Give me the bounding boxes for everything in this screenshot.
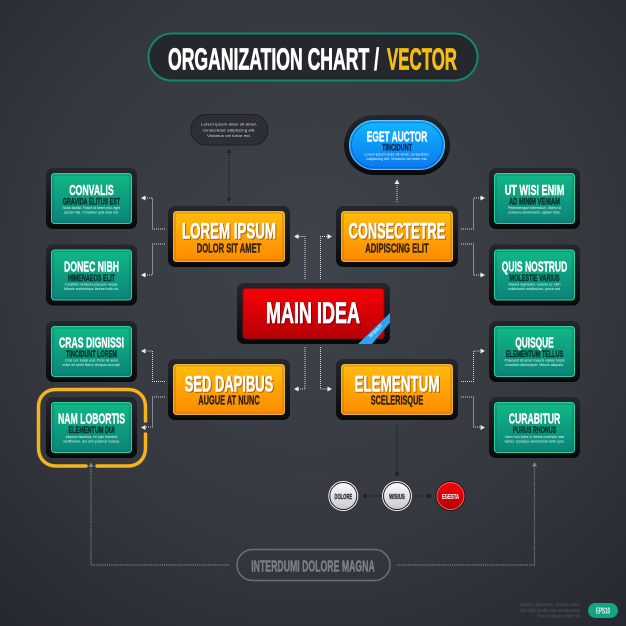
- connectors: left orange boxes to green cards: [141, 196, 165, 430]
- card: nam lobortis: Aliquam faucibus, mi quis tincidunt: [66, 435, 118, 439]
- circle: wisius: [382, 481, 412, 511]
- footer note: elit sollicitudin elit vestibulum: [520, 608, 581, 613]
- circle: egesta: [436, 481, 466, 511]
- card: nam lobortis: NAM LOBORTIS: [58, 411, 125, 428]
- yellow highlight frame: [38, 390, 146, 466]
- pill: eget auctor: adipiscing elit. Vivamus vel tortor est.: [366, 157, 428, 161]
- connectors: right orange boxes to green cards: [461, 196, 485, 430]
- card: ut wisi enim: [489, 168, 580, 229]
- circle: wisius: WISIUS: [389, 492, 405, 501]
- card: cras dignissi: Cras nec turpis erat. Proin sit amet: [65, 358, 118, 362]
- card: curabitur: [489, 397, 580, 458]
- card: ut wisi enim: AD MINIM VENIAM: [509, 196, 560, 208]
- title text: ORGANIZATION CHART /: [168, 42, 379, 76]
- card: donec nibh: Mauris scelerisque laoreet odio sit.: [64, 287, 119, 291]
- box: elementum: SCELERISQUE: [371, 393, 423, 408]
- card: quisque: [489, 321, 580, 382]
- card: donec nibh: Curabitur vehicula posuere neque.: [64, 282, 118, 286]
- circle: dolore: DOLORE: [335, 492, 352, 501]
- card: convalis: GRAVIDA ELITUS EST: [63, 196, 120, 208]
- footer note: [520, 602, 581, 618]
- box: consectetre: ADIPISCING ELIT: [365, 240, 429, 255]
- footer note: lorem ipsum dolor sit: [538, 614, 581, 618]
- pill: eget auctor: EGET AUCTOR: [367, 129, 428, 145]
- card: curabitur: Nam non dolor a metus molestie wisi: [505, 435, 564, 439]
- badge: eps10: [588, 603, 618, 618]
- circle: egesta: EGESTA: [442, 492, 459, 501]
- box: main idea: [237, 283, 390, 344]
- box: main idea: MAIN IDEA: [266, 297, 360, 330]
- note bubble: [191, 114, 268, 145]
- card: nam lobortis: ELEMENTUM DUI: [68, 425, 114, 436]
- card: quisque: Praesent sit amet mauris varius turpis: [504, 358, 565, 362]
- card: quis nostrud: sollicitudin vestibulum, purus est.: [508, 287, 561, 291]
- card: quis nostrud: MOLESTIE VARIUS: [510, 273, 560, 284]
- box: elementum: ELEMENTUM: [354, 372, 440, 396]
- badge: eps10: EPS10: [596, 607, 610, 616]
- card: quisque: QUISQUE: [515, 334, 554, 352]
- card: quis nostrud: Mauris dignissim, mauris ac nibh: [508, 282, 560, 286]
- box: consectetre: CONSECTETRE: [349, 219, 445, 244]
- pill: interdumi dolore magna: [237, 550, 390, 580]
- card: ut wisi enim: Pellentesque bibendum, libero id: [508, 206, 561, 210]
- title text: VECTOR: [387, 42, 457, 76]
- card: quisque: convallis ullamcorper. Mauris aliquam.: [505, 363, 564, 367]
- title pill: [148, 34, 478, 80]
- box: elementum: [336, 359, 458, 420]
- box: lorem ipsum: [168, 206, 290, 267]
- box: lorem ipsum: LOREM IPSUM: [182, 219, 276, 244]
- connectors: interdumi pill to cards: [88, 462, 537, 565]
- note bubble: Vivamus vel tortor est.: [207, 133, 251, 138]
- note bubble: Lorem ipsum dolor sit amet,: [201, 122, 257, 126]
- connectors: elementum to circles: [362, 424, 432, 498]
- ribbon: [358, 313, 390, 344]
- card: curabitur: PURUS RHONUS: [513, 425, 556, 436]
- circle: dolore: [328, 481, 358, 511]
- card: ut wisi enim: posuere elementum, sapien felis.: [508, 210, 560, 214]
- card: nam lobortis: [46, 397, 137, 458]
- card: ut wisi enim: UT WISI ENIM: [505, 182, 564, 199]
- box: sed dapibus: AUGUE AT NUNC: [198, 393, 260, 408]
- pill: eget auctor: [344, 115, 450, 175]
- card: quis nostrud: [489, 244, 580, 306]
- card: donec nibh: DONEC NIBH: [64, 258, 119, 276]
- card: cras dignissi: [46, 321, 137, 382]
- connector: consectetre to eget auctor: [394, 180, 400, 202]
- card: convalis: Nulla facilisi. Fusce ut lorem nisl, eget: [63, 206, 120, 210]
- box: lorem ipsum: DOLOR SIT AMET: [197, 240, 261, 255]
- card: quisque: ELEMENTUM TELLUS: [506, 349, 563, 360]
- pill: eget auctor: TINCIDUNT: [382, 143, 412, 154]
- connectors: main idea to orange boxes: [294, 234, 332, 392]
- card: convalis: auctor nisi. Curabitur quis ante est.: [64, 210, 119, 214]
- pill: eget auctor: Lorem ipsum dolor sit amet, consectetur: [364, 152, 430, 156]
- card: donec nibh: HIMENAEOS ELIT: [68, 273, 115, 284]
- card: nam lobortis: vestibulum, dui orci pulvinar massa.: [63, 439, 120, 443]
- box: sed dapibus: SED DAPIBUS: [185, 372, 273, 396]
- card: convalis: [46, 168, 137, 229]
- card: curabitur: varius. Quisque elementum ante quis.: [504, 439, 564, 443]
- pill: interdumi dolore magna: INTERDUMI DOLORE MAGNA: [251, 558, 375, 575]
- ribbon: TOP QUALITY: [368, 323, 383, 339]
- card: curabitur: CURABITUR: [509, 411, 560, 428]
- card: convalis: CONVALIS: [69, 182, 114, 199]
- note bubble: consectetur adipiscing elit.: [202, 128, 256, 132]
- card: cras dignissi: TINCIDUNT LOREM: [66, 349, 117, 360]
- card: cras dignissi: CRAS DIGNISSI: [59, 334, 124, 352]
- box: consectetre: [336, 206, 458, 267]
- card: cras dignissi: enim sit amet libero tempus suscipit.: [62, 363, 120, 367]
- connector: note to lorem ipsum: [227, 149, 231, 202]
- card: donec nibh: [46, 244, 137, 306]
- card: quis nostrud: QUIS NOSTRUD: [502, 258, 567, 276]
- box: sed dapibus: [168, 359, 290, 420]
- footer note: Mauris dignissim, mauris amet: [520, 602, 581, 607]
